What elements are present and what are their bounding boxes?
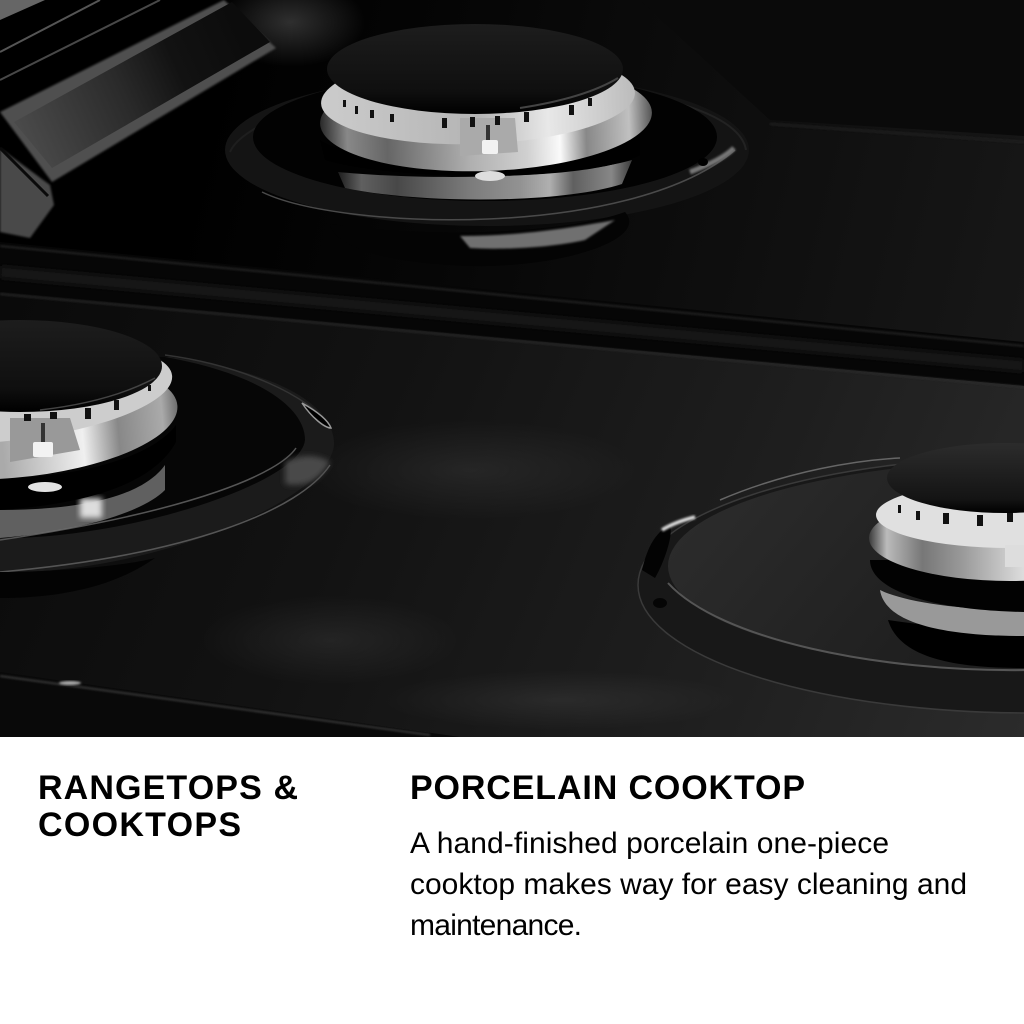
reflection in tray xyxy=(338,160,632,200)
reflections under ring xyxy=(888,620,1024,668)
cap xyxy=(888,456,1024,513)
tray well xyxy=(0,357,305,538)
tray lip xyxy=(746,466,1024,712)
flame ports xyxy=(898,505,1013,526)
shadow under ring xyxy=(508,164,616,176)
heading: product category: COOKTOPS xyxy=(38,806,241,844)
cap xyxy=(327,24,623,114)
tray well xyxy=(668,469,932,660)
reflection in tray xyxy=(0,465,165,538)
burner: right xyxy=(638,443,1024,713)
heading: product category: RANGETOPS & xyxy=(38,769,298,807)
flame ports xyxy=(343,98,592,128)
body text: feature description: cooktop makes way for easy cleaning and xyxy=(410,868,967,901)
burner: left xyxy=(0,320,334,598)
body text: feature description: A hand-finished porcelain one-piece xyxy=(410,827,889,860)
heading: product category xyxy=(38,769,298,844)
textured ring xyxy=(0,360,172,442)
burner: top centre xyxy=(225,24,749,266)
reflection below tray xyxy=(0,558,155,598)
lower cooktop surface xyxy=(0,290,1024,737)
textured top of ring xyxy=(321,75,635,144)
steel band xyxy=(869,522,1024,581)
cap xyxy=(0,320,162,412)
grate handle, top-left xyxy=(0,0,276,238)
upper cooktop surface xyxy=(670,82,1024,342)
textured ring xyxy=(876,495,1020,548)
tray well xyxy=(253,88,717,201)
tray lip xyxy=(0,357,334,572)
front edge rail xyxy=(0,672,460,737)
reflection below tray xyxy=(608,212,628,234)
body text: feature description xyxy=(410,827,967,942)
divider rail between cooktop zones xyxy=(0,242,1024,387)
tray lip xyxy=(225,88,684,226)
photo: porcelain cooktop with three burners xyxy=(0,0,1024,737)
pilot notch xyxy=(10,418,80,462)
heading: feature title: PORCELAIN COOKTOP xyxy=(410,769,805,807)
flame ports xyxy=(24,385,151,421)
steel band xyxy=(320,90,652,172)
pilot notch xyxy=(460,118,518,156)
back panel, upper right xyxy=(215,0,1024,142)
body text: feature description: maintenance. xyxy=(410,909,582,942)
steel band xyxy=(0,388,178,479)
